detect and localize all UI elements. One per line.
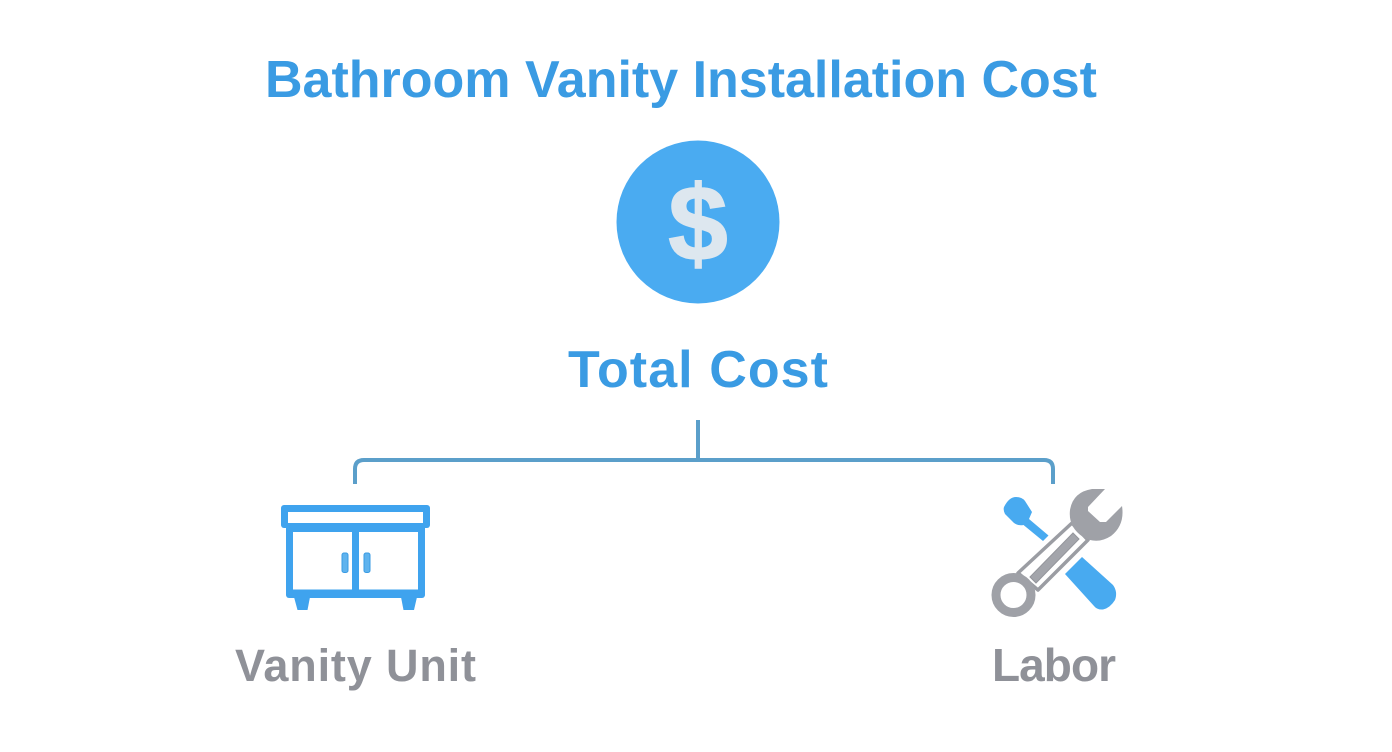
connector: tree bracket [355,420,1053,484]
icon: crossed wrench and screwdriver [996,489,1123,612]
icon: dollar coin: $ [668,163,728,283]
wrench ring [996,578,1031,612]
icon: dollar coin [616,140,780,304]
screwdriver tip [1004,497,1048,541]
heading: total cost: Total Cost [568,341,828,399]
screwdriver handle [1065,557,1116,610]
icon: vanity cabinet [281,505,430,610]
label: labor: Labor [992,639,1116,691]
wrench shaft [1018,523,1088,590]
label: vanity unit: Vanity Unit [235,640,476,691]
title: Bathroom Vanity Installation Cost [265,51,1097,109]
wrench head [1070,489,1123,541]
